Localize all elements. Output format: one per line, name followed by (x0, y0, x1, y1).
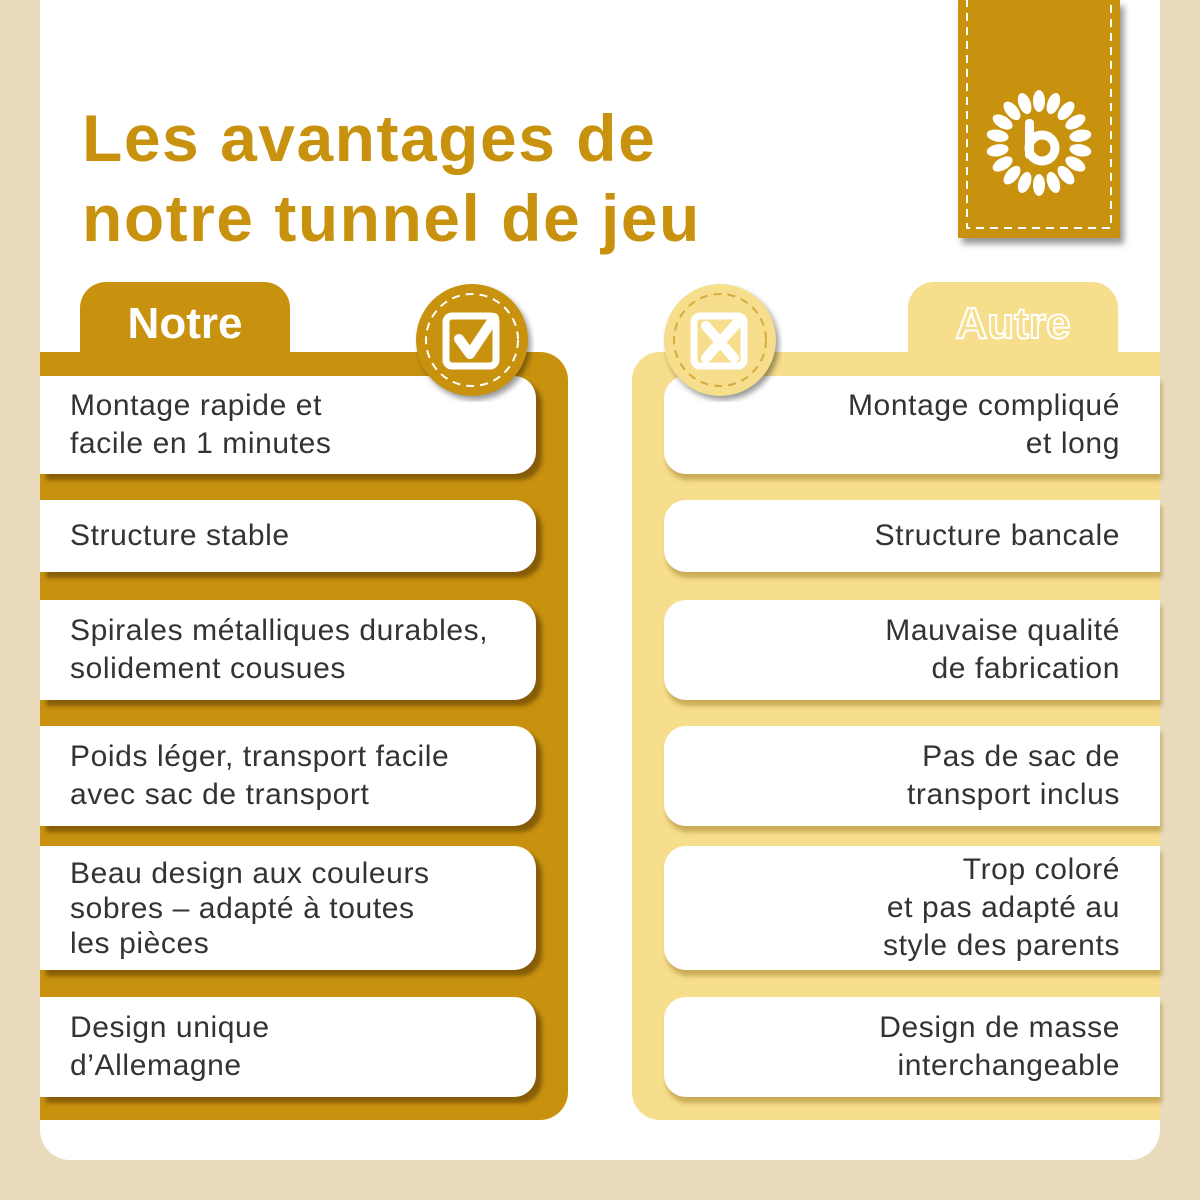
tab: Notre (80, 282, 290, 362)
right rows: et long (1026, 427, 1120, 460)
tab: Notre: Notre (128, 299, 242, 348)
text: Pas de sac de (922, 740, 1120, 773)
text: les pièces (70, 926, 209, 960)
logo tag (958, 0, 1120, 238)
text: Poids léger, transport facile (70, 740, 449, 773)
left rows (40, 376, 536, 474)
left rows: facile en 1 minutes (70, 427, 332, 460)
panel: autre (632, 352, 1160, 1120)
title: notre tunnel de jeu (82, 181, 701, 255)
text: avec sac de transport (70, 778, 369, 811)
right rows: Montage compliqué (848, 389, 1120, 422)
icon: cross (664, 284, 782, 402)
text: sobres – adapté à toutes (70, 892, 415, 924)
title: Les avantages de (82, 101, 656, 175)
text: Structure stable (70, 519, 290, 552)
text: Structure bancale (875, 519, 1120, 552)
text: et pas adapté au (887, 891, 1120, 924)
text: Design de masse (879, 1011, 1120, 1044)
text: interchangeable (897, 1049, 1120, 1082)
icon: check (416, 284, 534, 402)
right rows (664, 376, 1160, 474)
text: Beau design aux couleurs (70, 856, 430, 890)
title (82, 101, 701, 255)
text: Spirales métalliques durables, (70, 614, 488, 647)
text: d’Allemagne (70, 1049, 242, 1082)
text: transport inclus (907, 778, 1120, 811)
text: Design unique (70, 1011, 270, 1044)
text: Trop coloré (963, 853, 1120, 886)
left rows: Montage rapide et (70, 389, 322, 422)
text: de fabrication (931, 652, 1120, 685)
text: style des parents (883, 929, 1120, 962)
text: Mauvaise qualité (885, 614, 1120, 647)
text: solidement cousues (70, 652, 346, 685)
tab: Autre (908, 282, 1118, 362)
tab: Autre: Autre (956, 299, 1070, 348)
panel: notre (40, 352, 568, 1120)
